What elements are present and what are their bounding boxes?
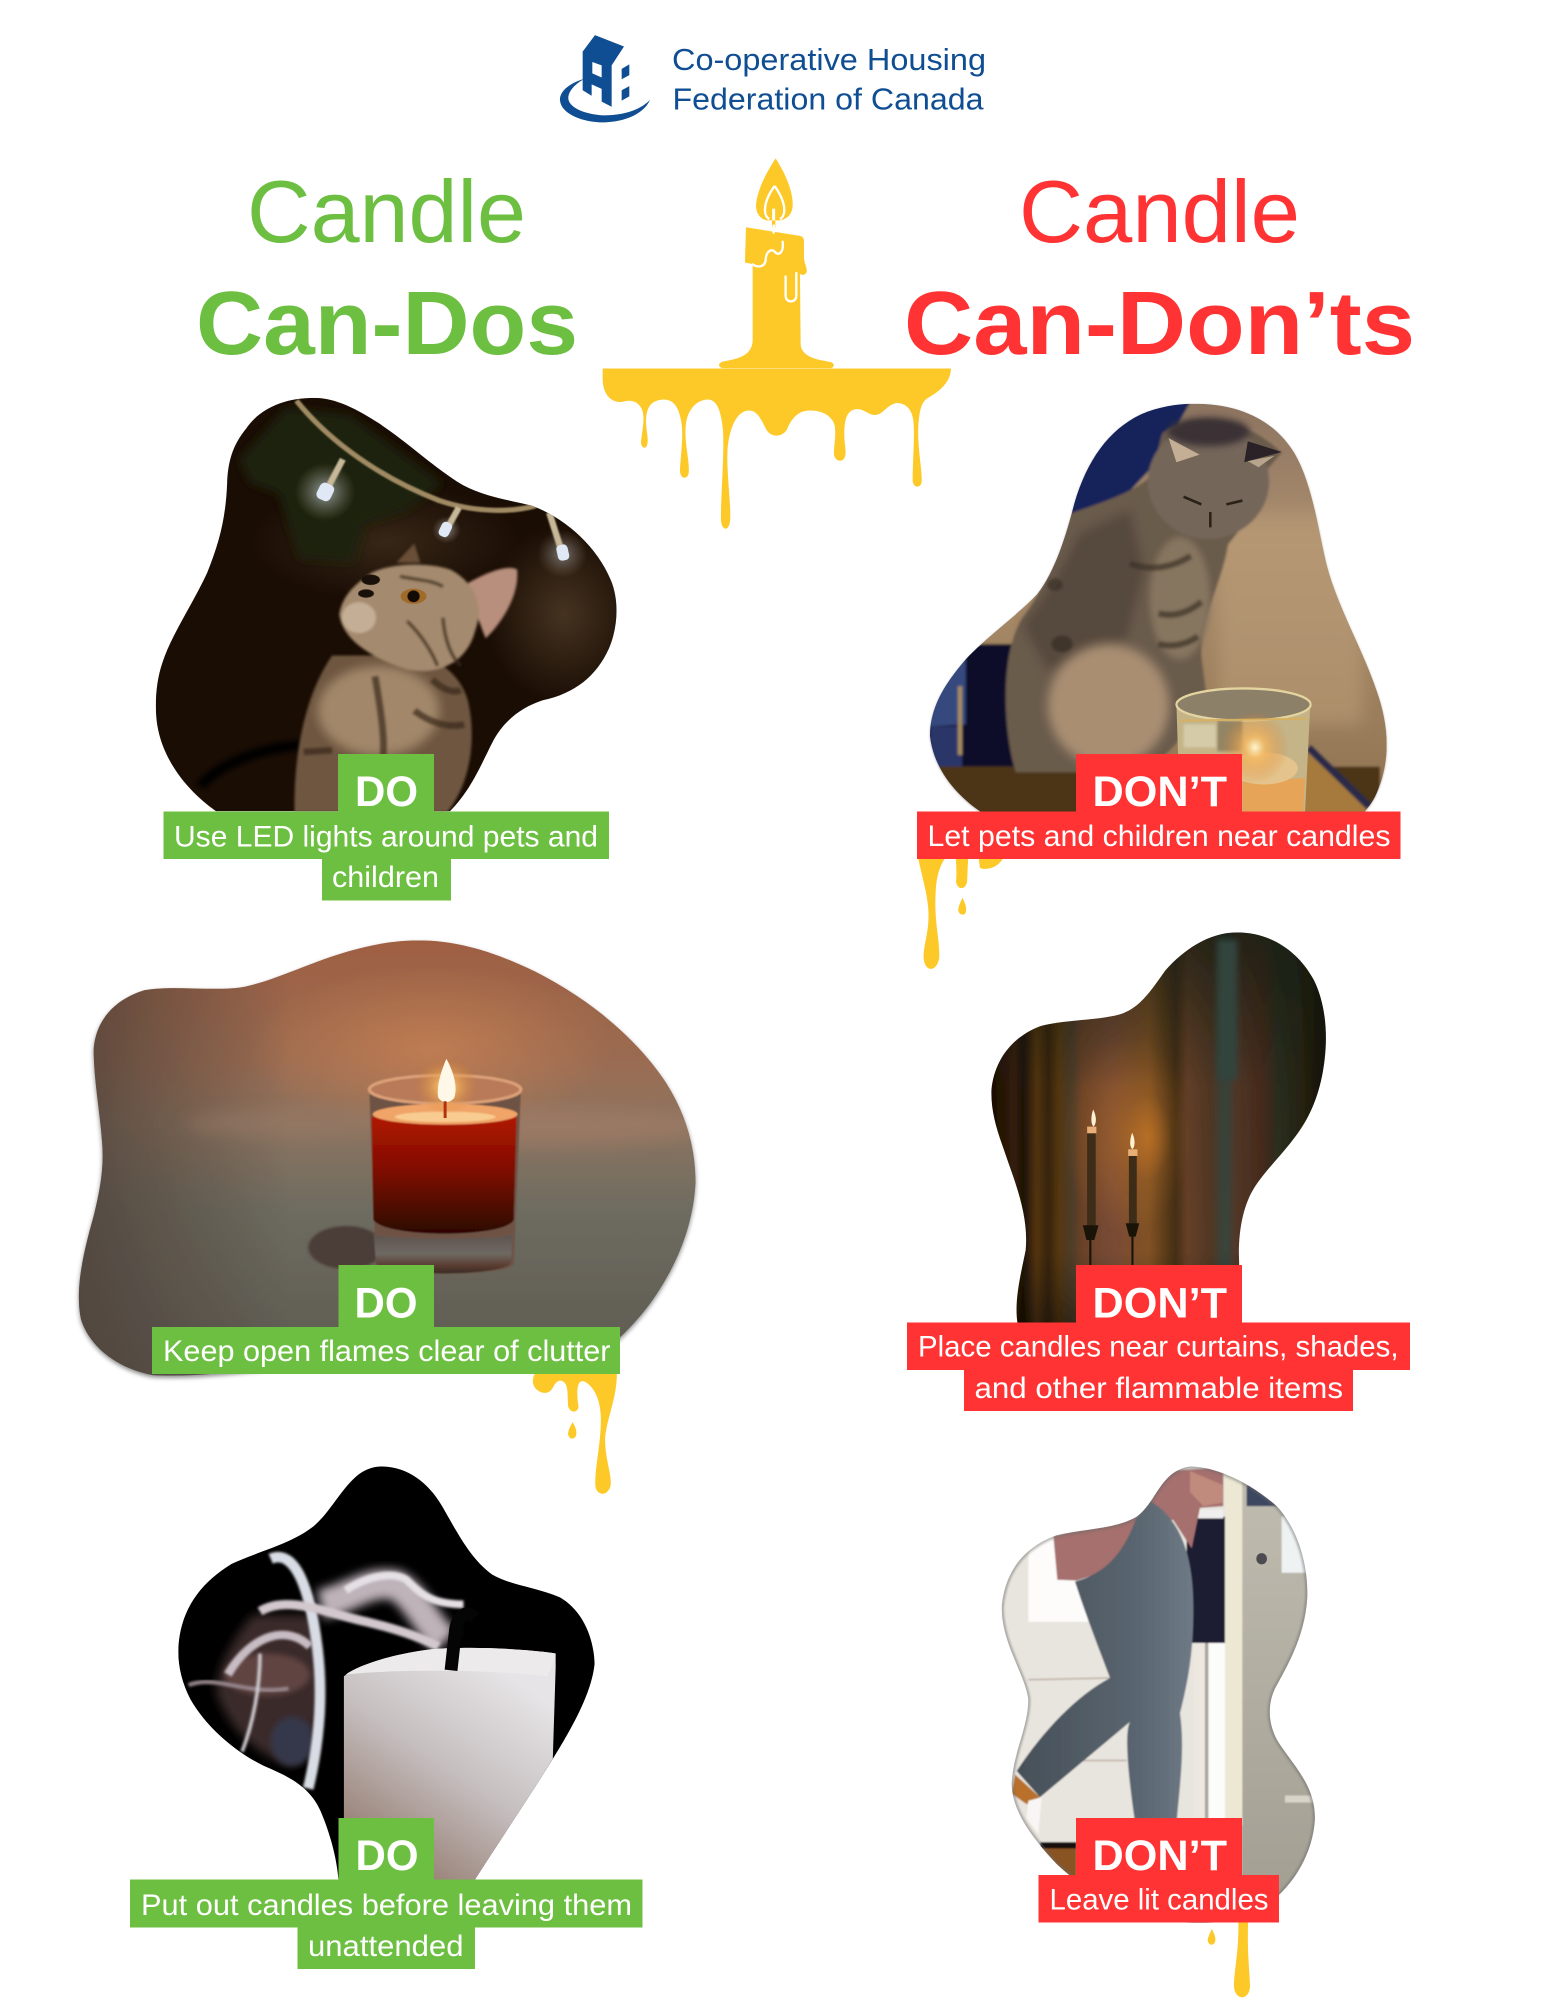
heading: Candle Can-Don'ts: Candle [1019,162,1300,261]
label text [1050,1832,1268,1916]
label background [130,1818,642,1969]
photo blob: blown-out white candle with smoke [178,1466,594,1880]
label text: Keep open flames clear of clutter [163,1335,611,1368]
kitten body [294,544,517,817]
label text [918,1280,1398,1405]
label text: DON’T [1092,1280,1227,1328]
photo blob: candlesticks near curtains [991,932,1326,1322]
label text: Let pets and children near candles [928,820,1390,853]
photo blob: red candle in glass [76,940,699,1381]
photo blob: cat beside lit candle in glass [916,395,1398,824]
label text: Leave lit candles [1050,1884,1268,1916]
label text [174,768,598,894]
label text: Place candles near curtains, shades, [918,1330,1398,1364]
label panel: DO use LED lights [164,754,609,900]
shirt [1053,1468,1223,1580]
logo text: Federation of Canada [672,82,984,116]
label text: Put out candles before leaving them [141,1889,632,1922]
label panel: DON'T leave lit candles [1038,1818,1279,1922]
heading: Candle Can-Dos [196,162,578,374]
photo blob: person walking away through door [993,1461,1327,1934]
label panel: DON'T place candles near curtains [907,1265,1410,1411]
label text: children [332,861,439,894]
label text [163,1280,611,1368]
icon: building with swoosh [560,35,650,122]
label panel: DO put out candles [130,1818,642,1969]
icon: melting candle on dripping shelf [603,158,951,529]
label background [152,1265,620,1374]
smoke [217,1615,321,1766]
label text: Use LED lights around pets and [174,820,598,854]
label panel: DON'T let pets near candles [917,754,1400,859]
candle right [1129,1152,1137,1225]
leggings [1017,1501,1193,1822]
soft edge shade [1002,1466,1315,1923]
label text [141,1832,632,1963]
dripping wax beside legs panel [1208,1869,1251,1997]
cat body [1006,419,1282,772]
label text: unattended [308,1930,464,1963]
label text: DON’T [1092,1832,1227,1880]
logo: Co-operative Housing Federation of Canada [560,35,986,122]
logo text [672,42,986,116]
label background [917,754,1400,859]
heading: Candle Can-Don'ts: Can-Don’ts [904,274,1415,374]
heading: Candle Can-Dos: Candle [247,162,526,261]
label text: DO [355,768,418,816]
heading: Candle Can-Don'ts [904,162,1415,374]
dripping wax beside candle panel [533,1370,617,1494]
label background [1038,1818,1279,1922]
glass and wax [369,1075,521,1274]
label text: and other flammable items [974,1372,1343,1405]
photo blob: kitten looking at LED lights [156,398,616,812]
wick [451,1614,475,1670]
glass candle [1176,703,1310,814]
label text: DON’T [1092,768,1227,816]
label text: DO [356,1832,418,1880]
bulbs [316,482,334,502]
label background [907,1265,1410,1411]
dripping wax beside don't-cat panel [917,855,1005,969]
heading: Candle Can-Dos: Can-Dos [196,274,578,374]
label panel: DO keep flames clear [152,1265,620,1374]
candle left [1087,1128,1096,1227]
fir branch [239,408,443,563]
logo text: Co-operative Housing [672,42,986,77]
label text: DO [354,1280,418,1328]
label text [928,768,1390,853]
label background [164,754,609,900]
kitten head [396,544,420,563]
candle body [344,1648,556,1885]
